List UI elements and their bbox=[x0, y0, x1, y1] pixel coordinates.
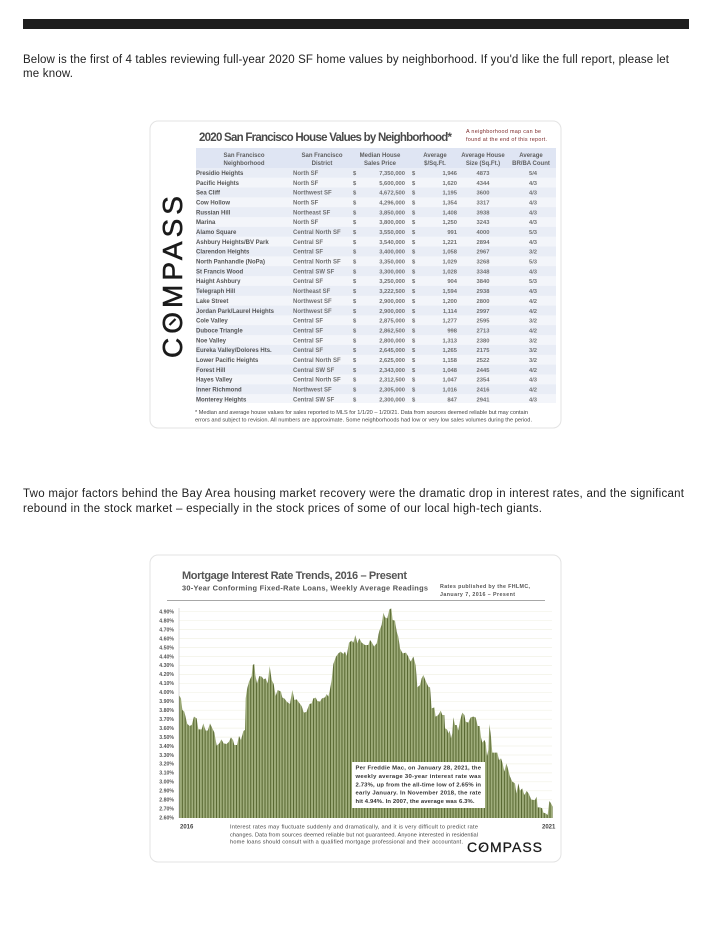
table rows: Central North SF bbox=[293, 378, 341, 384]
table rows: Central SF bbox=[293, 319, 323, 325]
table rows: 5,600,000 bbox=[379, 181, 405, 187]
callout: Freddie Mac note: Per Freddie Mac, on January 28, 2021, the bbox=[356, 765, 482, 771]
table background bands bbox=[196, 148, 556, 403]
table rows: $ bbox=[412, 397, 416, 403]
table rows: $ bbox=[353, 328, 357, 334]
table rows: North SF bbox=[293, 181, 319, 187]
second paragraph bbox=[23, 488, 685, 515]
callout: Freddie Mac note: weekly average 30-year interest rate was bbox=[354, 774, 482, 780]
table rows: 2416 bbox=[477, 388, 490, 394]
Compass logo: COMPASS bbox=[467, 839, 542, 855]
table header: Sales Price bbox=[364, 161, 397, 167]
table rows: $ bbox=[412, 230, 416, 236]
table header: Average bbox=[519, 153, 543, 159]
table rows: Northeast SF bbox=[293, 210, 331, 216]
table rows: Central SW SF bbox=[293, 269, 335, 275]
table rows: 5/3 bbox=[529, 230, 538, 236]
table rows: St Francis Wood bbox=[196, 269, 244, 275]
map note bbox=[466, 129, 547, 143]
table rows: 3,222,500 bbox=[379, 289, 405, 295]
table rows: $ bbox=[412, 171, 416, 177]
table rows: Hayes Valley bbox=[196, 378, 233, 384]
table rows: Central SF bbox=[293, 279, 323, 285]
chart disclaimer: Interest rates may fluctuate suddenly and dramatically, and it is very difficult to predict rate bbox=[230, 825, 478, 831]
table rows: 4/3 bbox=[529, 378, 538, 384]
table rows: $ bbox=[353, 269, 357, 275]
table rows: 4/2 bbox=[529, 388, 537, 394]
table header: Median House bbox=[360, 153, 401, 159]
table rows: 4/2 bbox=[529, 328, 537, 334]
table rows: 1,200 bbox=[442, 299, 457, 305]
table header: $/Sq.Ft. bbox=[424, 161, 446, 167]
table rows: 3,250,000 bbox=[379, 279, 405, 285]
table rows: 2894 bbox=[477, 240, 490, 246]
table rows: $ bbox=[412, 348, 416, 354]
x-axis labels: 2021 bbox=[542, 824, 556, 830]
y-axis labels: 4.70% bbox=[159, 627, 174, 633]
table rows: Jordan Park/Laurel Heights bbox=[196, 309, 275, 315]
table rows: $ bbox=[353, 200, 357, 206]
second paragraph: rebound in the stock market – especially in the stock prices of some of our local high-tech giants. bbox=[23, 503, 542, 515]
table rows: 2,862,500 bbox=[379, 328, 405, 334]
y-axis labels: 4.60% bbox=[159, 636, 174, 642]
table header: Neighborhood bbox=[224, 161, 265, 167]
table rows: 2,343,000 bbox=[379, 368, 405, 374]
callout: Freddie Mac note: hit 4.94%. In 2007, the average was 6.3%. bbox=[356, 799, 475, 805]
table rows: $ bbox=[412, 220, 416, 226]
y-axis labels: 2.90% bbox=[159, 789, 174, 795]
table rows: 4/3 bbox=[529, 210, 538, 216]
table rows: 3243 bbox=[477, 220, 490, 226]
table rows: 1,047 bbox=[442, 378, 457, 384]
table rows: 2595 bbox=[477, 319, 490, 325]
table rows: $ bbox=[353, 358, 357, 364]
y-axis labels: 3.50% bbox=[159, 735, 174, 741]
table rows: 2354 bbox=[477, 378, 490, 384]
table rows: 4873 bbox=[477, 171, 490, 177]
table rows: 2380 bbox=[477, 338, 489, 344]
table rows: Central SW SF bbox=[293, 368, 335, 374]
x-axis labels: 2016 bbox=[180, 824, 194, 830]
table rows: Sea Cliff bbox=[196, 191, 221, 197]
table rows: 998 bbox=[447, 328, 458, 334]
table rows: Ashbury Heights/BV Park bbox=[196, 240, 269, 246]
table rows: 2,900,000 bbox=[379, 299, 405, 305]
table rows: $ bbox=[353, 210, 357, 216]
table rows: 4344 bbox=[477, 181, 490, 187]
table rows: 2713 bbox=[477, 328, 490, 334]
table rows: Cow Hollow bbox=[196, 200, 230, 206]
table rows: 2522 bbox=[477, 358, 489, 364]
table rows: $ bbox=[412, 289, 416, 295]
table rows: Central SF bbox=[293, 348, 323, 354]
table rows: 2800 bbox=[477, 299, 489, 305]
top black banner bbox=[23, 19, 689, 29]
table rows: 3/2 bbox=[529, 250, 537, 256]
table rows: $ bbox=[412, 319, 416, 325]
table rows: 2,305,000 bbox=[379, 388, 405, 394]
table rows: $ bbox=[353, 240, 357, 246]
table rows: 2,625,000 bbox=[379, 358, 405, 364]
chart disclaimer: changes. Data from sources deemed reliable but not guaranteed. Anyone interested in residential bbox=[230, 833, 478, 839]
table rows: 847 bbox=[447, 397, 457, 403]
table rows: 991 bbox=[447, 230, 458, 236]
table rows: 2,645,000 bbox=[379, 348, 405, 354]
y-axis labels: 3.20% bbox=[159, 762, 174, 768]
table rows: 1,250 bbox=[442, 220, 457, 226]
y-axis labels: 4.40% bbox=[159, 654, 174, 660]
y-axis labels: 3.10% bbox=[159, 771, 174, 777]
table rows: 2967 bbox=[477, 250, 489, 256]
source note: January 7, 2016 – Present bbox=[440, 592, 515, 598]
y-axis labels: 3.90% bbox=[159, 699, 174, 705]
table rows: 4/2 bbox=[529, 368, 537, 374]
callout: Freddie Mac note: early January. In November 2018, the rate bbox=[356, 791, 482, 797]
table rows: Lower Pacific Heights bbox=[196, 358, 259, 364]
y-axis labels: 3.80% bbox=[159, 708, 174, 714]
table rows: Russian Hill bbox=[196, 210, 231, 216]
y-axis labels bbox=[159, 610, 174, 822]
table rows: $ bbox=[412, 260, 416, 266]
table rows: 3,800,000 bbox=[379, 220, 405, 226]
table rows: 2,312,500 bbox=[379, 378, 405, 384]
y-axis labels: 3.00% bbox=[159, 780, 174, 786]
table rows: 2445 bbox=[477, 368, 490, 374]
intro paragraph: Below is the first of 4 tables reviewing full-year 2020 SF home values by neighborhood. If you'd like the full report, please let bbox=[23, 54, 670, 66]
table rows: Central North SF bbox=[293, 230, 341, 236]
table rows: 3,400,000 bbox=[379, 250, 405, 256]
bar chart: weekly mortgage rates bbox=[179, 600, 553, 818]
table rows: Forest Hill bbox=[196, 368, 226, 374]
table header: BR/BA Count bbox=[512, 161, 550, 167]
table rows: 4/3 bbox=[529, 397, 538, 403]
table rows: 4000 bbox=[477, 230, 489, 236]
table rows: Central North SF bbox=[293, 260, 341, 266]
table rows: 4/2 bbox=[529, 299, 537, 305]
table rows: 1,946 bbox=[442, 171, 458, 177]
table rows: Monterey Heights bbox=[196, 397, 247, 403]
table rows: $ bbox=[353, 250, 357, 256]
table rows: 2,300,000 bbox=[379, 397, 405, 403]
table rows: $ bbox=[353, 289, 357, 295]
y-axis labels: 2.70% bbox=[159, 806, 174, 812]
table rows: $ bbox=[412, 358, 416, 364]
table rows: 3840 bbox=[477, 279, 489, 285]
table rows: 4/3 bbox=[529, 269, 538, 275]
table rows: 2941 bbox=[477, 397, 490, 403]
intro paragraph bbox=[23, 54, 670, 80]
table rows: $ bbox=[353, 230, 357, 236]
table rows: 2175 bbox=[477, 348, 490, 354]
table rows: Alamo Square bbox=[196, 230, 237, 236]
table rows: 1,195 bbox=[442, 191, 458, 197]
table rows: 3/2 bbox=[529, 338, 537, 344]
table rows: Central SF bbox=[293, 250, 323, 256]
table rows: 4/3 bbox=[529, 200, 538, 206]
table rows: Lake Street bbox=[196, 299, 228, 305]
y-axis labels: 3.40% bbox=[159, 744, 174, 750]
map note: A neighborhood map can be bbox=[466, 129, 541, 135]
table rows: Cole Valley bbox=[196, 319, 228, 325]
table rows: $ bbox=[412, 240, 416, 246]
table rows: Duboce Triangle bbox=[196, 328, 243, 334]
y-axis labels: 4.10% bbox=[159, 681, 174, 687]
table rows: 3,550,000 bbox=[379, 230, 405, 236]
table rows: Central SF bbox=[293, 328, 323, 334]
table footnote: * Median and average house values for sales reported to MLS for 1/1/20 – 1/20/21. Data from sources deemed reliable but may contain bbox=[195, 410, 528, 416]
table rows: 4,296,000 bbox=[379, 200, 405, 206]
table rows: 3348 bbox=[477, 269, 490, 275]
table rows: 2997 bbox=[477, 309, 489, 315]
table rows: $ bbox=[412, 250, 416, 256]
table rows: 3938 bbox=[477, 210, 490, 216]
y-axis labels: 3.60% bbox=[159, 726, 174, 732]
table rows: North SF bbox=[293, 200, 319, 206]
table rows: 2,875,000 bbox=[379, 319, 405, 325]
chart title: Mortgage Interest Rate Trends, 2016 – Present bbox=[182, 570, 407, 582]
table rows: $ bbox=[412, 328, 416, 334]
source note bbox=[440, 584, 531, 598]
table rows: Marina bbox=[196, 220, 216, 226]
table rows: 7,350,000 bbox=[379, 171, 405, 177]
table rows: 3,850,000 bbox=[379, 210, 405, 216]
table rows: 3/2 bbox=[529, 358, 537, 364]
table rows bbox=[196, 171, 538, 403]
table rows: $ bbox=[412, 279, 416, 285]
table rows: 2,800,000 bbox=[379, 338, 405, 344]
table rows: Central SF bbox=[293, 338, 323, 344]
table rows: 1,354 bbox=[442, 200, 458, 206]
table rows: $ bbox=[353, 260, 357, 266]
table rows: Pacific Heights bbox=[196, 181, 240, 187]
table rows: $ bbox=[353, 388, 357, 394]
table rows: 1,048 bbox=[442, 368, 458, 374]
table rows: 4/3 bbox=[529, 181, 538, 187]
table footnote bbox=[195, 410, 532, 424]
table rows: Presidio Heights bbox=[196, 171, 244, 177]
table rows: $ bbox=[353, 378, 357, 384]
table rows: 904 bbox=[447, 279, 458, 285]
table rows: $ bbox=[353, 220, 357, 226]
table rows: $ bbox=[412, 181, 416, 187]
table rows: $ bbox=[412, 368, 416, 374]
table rows: $ bbox=[412, 309, 416, 315]
table rows: $ bbox=[353, 319, 357, 325]
table rows: $ bbox=[353, 368, 357, 374]
table rows: Noe Valley bbox=[196, 338, 227, 344]
table header: San Francisco bbox=[223, 153, 265, 159]
table rows: $ bbox=[353, 279, 357, 285]
table rows: 1,313 bbox=[442, 338, 458, 344]
table rows: $ bbox=[412, 191, 416, 197]
table rows: $ bbox=[412, 269, 416, 275]
table rows: 4/2 bbox=[529, 309, 537, 315]
table rows: Northeast SF bbox=[293, 289, 331, 295]
chart gridlines bbox=[179, 612, 552, 809]
table rows: 4/3 bbox=[529, 289, 538, 295]
y-axis labels: 4.90% bbox=[159, 610, 174, 616]
y-axis labels: 4.20% bbox=[159, 672, 174, 678]
table rows: $ bbox=[353, 299, 357, 305]
table rows: 1,620 bbox=[442, 181, 457, 187]
table rows: 1,016 bbox=[442, 388, 458, 394]
table rows: 5/4 bbox=[529, 171, 538, 177]
table rows: Clarendon Heights bbox=[196, 250, 250, 256]
callout: Freddie Mac note: 2.73%, up from the all-time low of 2.65% in bbox=[356, 782, 481, 788]
table rows: Northwest SF bbox=[293, 299, 332, 305]
table header bbox=[223, 153, 550, 167]
table rows: 1,029 bbox=[442, 260, 458, 266]
table rows: Eureka Valley/Dolores Hts. bbox=[196, 348, 272, 354]
source note: Rates published by the FHLMC, bbox=[440, 584, 531, 590]
table rows: 3317 bbox=[477, 200, 489, 206]
table rows: $ bbox=[353, 191, 357, 197]
table rows: $ bbox=[353, 171, 357, 177]
table rows: 2,900,000 bbox=[379, 309, 405, 315]
table rows: $ bbox=[412, 200, 416, 206]
table rows: 3,540,000 bbox=[379, 240, 405, 246]
table rows: 3/2 bbox=[529, 319, 537, 325]
table rows: Haight Ashbury bbox=[196, 279, 241, 285]
table rows: North SF bbox=[293, 220, 319, 226]
y-axis labels: 2.80% bbox=[159, 798, 174, 804]
table rows: Northwest SF bbox=[293, 191, 332, 197]
table header: San Francisco bbox=[301, 153, 343, 159]
table rows: 1,265 bbox=[442, 348, 458, 354]
table rows: $ bbox=[412, 299, 416, 305]
table rows: 1,114 bbox=[443, 309, 458, 315]
panel: mortgage interest rate chart card bbox=[150, 555, 561, 862]
table rows: $ bbox=[412, 388, 416, 394]
table rows: North SF bbox=[293, 171, 319, 177]
y-axis labels: 4.80% bbox=[159, 618, 174, 624]
vertical Compass logo: COMPASS bbox=[157, 196, 188, 358]
table rows: 3/2 bbox=[529, 348, 537, 354]
table rows: $ bbox=[412, 210, 416, 216]
table rows: $ bbox=[353, 181, 357, 187]
y-axis labels: 4.30% bbox=[159, 663, 174, 669]
table header: Average House bbox=[461, 153, 505, 159]
table rows: $ bbox=[353, 309, 357, 315]
y-axis labels: 4.00% bbox=[159, 690, 174, 696]
table rows: North Panhandle (NoPa) bbox=[196, 260, 265, 266]
table rows: Northwest SF bbox=[293, 309, 332, 315]
table rows: 3268 bbox=[477, 260, 490, 266]
y-axis labels: 3.70% bbox=[159, 717, 174, 723]
table rows: $ bbox=[353, 397, 357, 403]
table rows: $ bbox=[412, 338, 416, 344]
table footnote: errors and subject to revision. All numbers are approximate. Some neighborhoods had low or very low sales volumes during the period. bbox=[195, 418, 532, 424]
chart disclaimer: home loans should consult with a qualified mortgage professional and their accountant. bbox=[230, 840, 463, 846]
chart subtitle: 30-Year Conforming Fixed-Rate Loans, Weekly Average Readings bbox=[182, 584, 428, 592]
table rows: 1,221 bbox=[442, 240, 458, 246]
table rows: 1,028 bbox=[442, 269, 458, 275]
table rows: 1,408 bbox=[442, 210, 458, 216]
table rows: 1,277 bbox=[442, 319, 457, 325]
table rows: Telegraph Hill bbox=[196, 289, 236, 295]
table rows: Central SF bbox=[293, 240, 323, 246]
map note: found at the end of this report. bbox=[466, 137, 547, 143]
table rows: 4/3 bbox=[529, 191, 538, 197]
table title: 2020 San Francisco House Values by Neighborhood* bbox=[199, 132, 453, 144]
table rows: $ bbox=[412, 378, 416, 384]
table rows: 5/3 bbox=[529, 279, 538, 285]
table rows: Inner Richmond bbox=[196, 388, 242, 394]
x-axis labels bbox=[180, 824, 556, 830]
second paragraph: Two major factors behind the Bay Area housing market recovery were the dramatic drop in interest rates, and the significant bbox=[23, 488, 685, 500]
y-axis labels: 3.30% bbox=[159, 753, 174, 759]
y-axis labels: 4.50% bbox=[159, 645, 174, 651]
table rows: 2938 bbox=[477, 289, 490, 295]
table header: Average bbox=[423, 153, 447, 159]
table rows: 5/3 bbox=[529, 260, 538, 266]
table rows: 3600 bbox=[477, 191, 489, 197]
table rows: 4/3 bbox=[529, 220, 538, 226]
panel: house values table card bbox=[150, 121, 561, 428]
callout: Freddie Mac note bbox=[352, 762, 485, 808]
table rows: 4/3 bbox=[529, 240, 538, 246]
chart disclaimer bbox=[230, 825, 478, 846]
intro paragraph: me know. bbox=[23, 68, 73, 80]
table rows: Central SW SF bbox=[293, 397, 335, 403]
table rows: 3,300,000 bbox=[379, 269, 405, 275]
table rows: 1,058 bbox=[442, 250, 458, 256]
table header: District bbox=[312, 161, 332, 167]
table rows: 4,672,500 bbox=[379, 191, 405, 197]
table rows: Central North SF bbox=[293, 358, 341, 364]
table rows: Northwest SF bbox=[293, 388, 332, 394]
y-axis labels: 2.60% bbox=[159, 816, 174, 822]
table rows: 1,594 bbox=[442, 289, 458, 295]
table header: Size (Sq.Ft.) bbox=[466, 161, 500, 167]
table rows: $ bbox=[353, 338, 357, 344]
table rows: 1,158 bbox=[442, 358, 458, 364]
table rows: 3,350,000 bbox=[379, 260, 405, 266]
table rows: $ bbox=[353, 348, 357, 354]
